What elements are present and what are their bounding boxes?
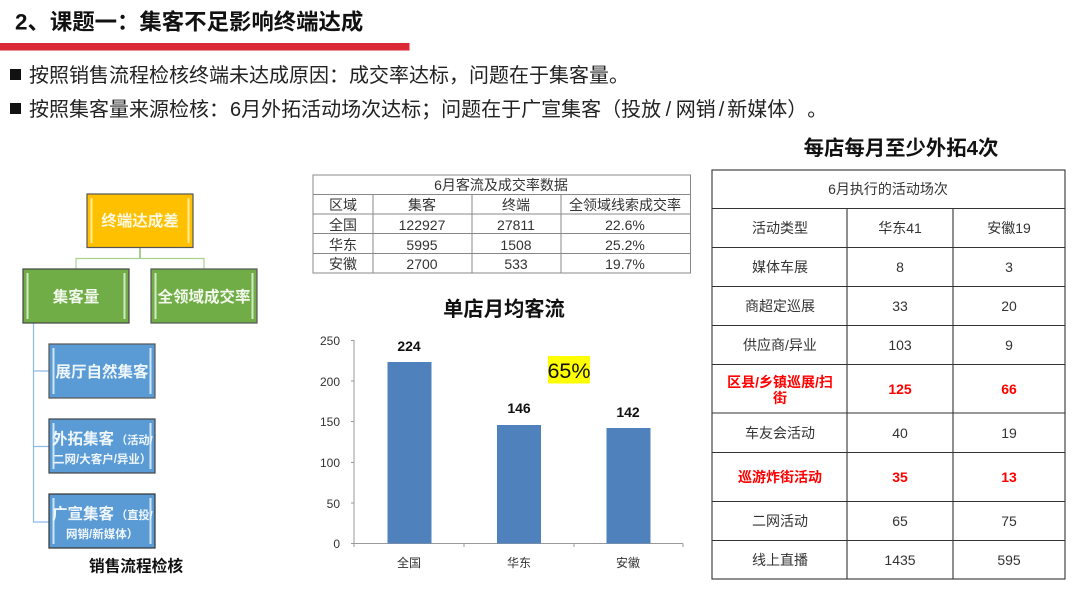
table: June traffic and conversion: 安徽	[329, 256, 357, 272]
table: June traffic and conversion: 22.6%	[605, 217, 645, 233]
table: June activity counts: 车友会活动	[745, 425, 815, 441]
y axis labels: 100	[320, 456, 340, 470]
box: 集客量: 集客量	[53, 287, 99, 306]
bar: 全国: 全国	[397, 555, 421, 570]
box: 全领域成交率: 全领域成交率	[157, 287, 251, 306]
highlighted row: 巡游炸街活动: 13	[1001, 469, 1017, 485]
box: 外拓集客: 外拓集客（活动/	[52, 429, 153, 448]
bar: 全国: 224	[397, 338, 421, 354]
highlighted row: 巡游炸街活动: 巡游炸街活动	[738, 469, 822, 485]
y axis labels: 50	[327, 497, 340, 511]
table: June activity counts: 二网活动	[752, 513, 808, 529]
table: June traffic and conversion: 1508	[500, 237, 532, 253]
bar: 安徽: 142	[616, 404, 640, 420]
table: June activity counts: 33	[892, 298, 908, 314]
y axis labels	[320, 334, 340, 551]
table: June traffic and conversion: 533	[504, 256, 528, 272]
org chart: sales process check	[23, 194, 257, 576]
table: June activity counts: 595	[997, 552, 1021, 568]
table: June activity counts: 8	[896, 259, 904, 275]
y axis labels: 250	[320, 334, 340, 348]
table: June activity counts: 103	[888, 337, 912, 353]
highlighted row: 区县/乡镇巡展/扫街: 66	[1001, 381, 1017, 397]
box: 外拓集客	[49, 419, 155, 473]
highlighted row: 区县/乡镇巡展/扫街: 街	[773, 390, 787, 406]
highlighted row: 区县/乡镇巡展/扫街: 125	[888, 381, 912, 397]
table: June traffic and conversion: 全领域线索成交率	[569, 197, 681, 213]
chart title: 单店月均客流	[443, 297, 565, 321]
bullet 2: 按照集客量来源检核：6月外拓活动场次达标；问题在于广宣集客（投放/网销/新媒体）。	[29, 98, 827, 121]
table: June traffic and conversion: 122927	[399, 217, 446, 233]
box: 全领域成交率	[151, 269, 257, 323]
table: June activity counts	[712, 170, 1065, 579]
table: June activity counts: 19	[1001, 425, 1017, 441]
box: 广宣集客	[49, 494, 155, 548]
table: June activity counts: 20	[1001, 298, 1017, 314]
highlighted row: 区县/乡镇巡展/扫街	[727, 374, 1017, 406]
table: June activity counts: 商超定巡展	[745, 298, 815, 314]
box: 广宣集客: 网销/新媒体）	[66, 527, 138, 541]
table: June traffic and conversion: 27811	[497, 217, 535, 233]
table: June traffic and conversion: 终端	[502, 197, 530, 213]
bar chart: monthly traffic per store	[320, 334, 683, 570]
highlighted row: 巡游炸街活动	[738, 469, 1017, 485]
table: June activity counts: 75	[1001, 513, 1017, 529]
table: June activity counts: 线上直播	[752, 552, 808, 568]
table: June activity counts: 华东41	[878, 220, 922, 236]
box: 终端达成差: 终端达成差	[101, 211, 179, 230]
bar: 安徽: 安徽	[616, 555, 640, 570]
bullet list	[10, 64, 827, 121]
table: June activity counts: 1435	[884, 552, 916, 568]
right table heading: 每店每月至少外拓4次	[804, 137, 998, 160]
box: 集客量	[23, 269, 129, 323]
axes	[351, 340, 683, 547]
table: June activity counts: 3	[1005, 259, 1013, 275]
box: 展厅自然集客: 展厅自然集客	[55, 362, 149, 381]
title: 2、课题一：集客不足影响终端达成	[15, 8, 363, 34]
caption: 销售流程检核: 销售流程检核	[89, 556, 183, 576]
box: 外拓集客: 二网/大客户/异业）	[53, 452, 151, 466]
bar: 华东	[497, 400, 541, 570]
bar: 华东: 华东	[507, 556, 531, 570]
highlighted row: 区县/乡镇巡展/扫街: 区县/乡镇巡展/扫	[727, 374, 833, 390]
table: June traffic and conversion: 华东	[329, 237, 357, 253]
bar: 华东: 146	[507, 400, 531, 416]
bar: 全国	[388, 338, 432, 570]
table: June activity counts: 活动类型	[752, 220, 808, 236]
y axis labels: 0	[333, 537, 340, 551]
y axis labels: 150	[320, 415, 340, 429]
y axis labels: 200	[320, 375, 340, 389]
table: June traffic and conversion: 25.2%	[605, 237, 645, 253]
callout: 65%: 65%	[547, 359, 591, 383]
table: June traffic and conversion: 6月客流及成交率数据	[434, 177, 568, 193]
table: June traffic and conversion	[313, 175, 690, 273]
table: June traffic and conversion: 2700	[406, 256, 438, 272]
red title rule	[0, 43, 410, 50]
table: June activity counts: 安徽19	[987, 220, 1031, 236]
table: June activity counts: 9	[1005, 337, 1013, 353]
box: 广宣集客: 广宣集客（直投/	[52, 504, 153, 523]
table: June traffic and conversion: 区域	[329, 197, 357, 213]
table: June traffic and conversion: 19.7%	[605, 256, 645, 272]
table: June activity counts: 供应商/异业	[743, 337, 817, 353]
table: June traffic and conversion: 全国	[329, 217, 357, 233]
table: June traffic and conversion: 5995	[406, 237, 438, 253]
connector lines	[34, 247, 204, 522]
table: June activity counts: 6月执行的活动场次	[828, 181, 948, 197]
highlighted row: 巡游炸街活动: 35	[892, 469, 908, 485]
table: June traffic and conversion: 集客	[408, 197, 436, 213]
bullet 1: 按照销售流程检核终端未达成原因：成交率达标，问题在于集客量。	[29, 64, 629, 87]
table: June activity counts: 40	[892, 425, 908, 441]
box: 终端达成差	[87, 194, 193, 248]
bar: 安徽	[606, 404, 650, 570]
box: 展厅自然集客	[49, 344, 155, 398]
table: June activity counts: 媒体车展	[752, 259, 808, 275]
table: June activity counts: 65	[892, 513, 908, 529]
